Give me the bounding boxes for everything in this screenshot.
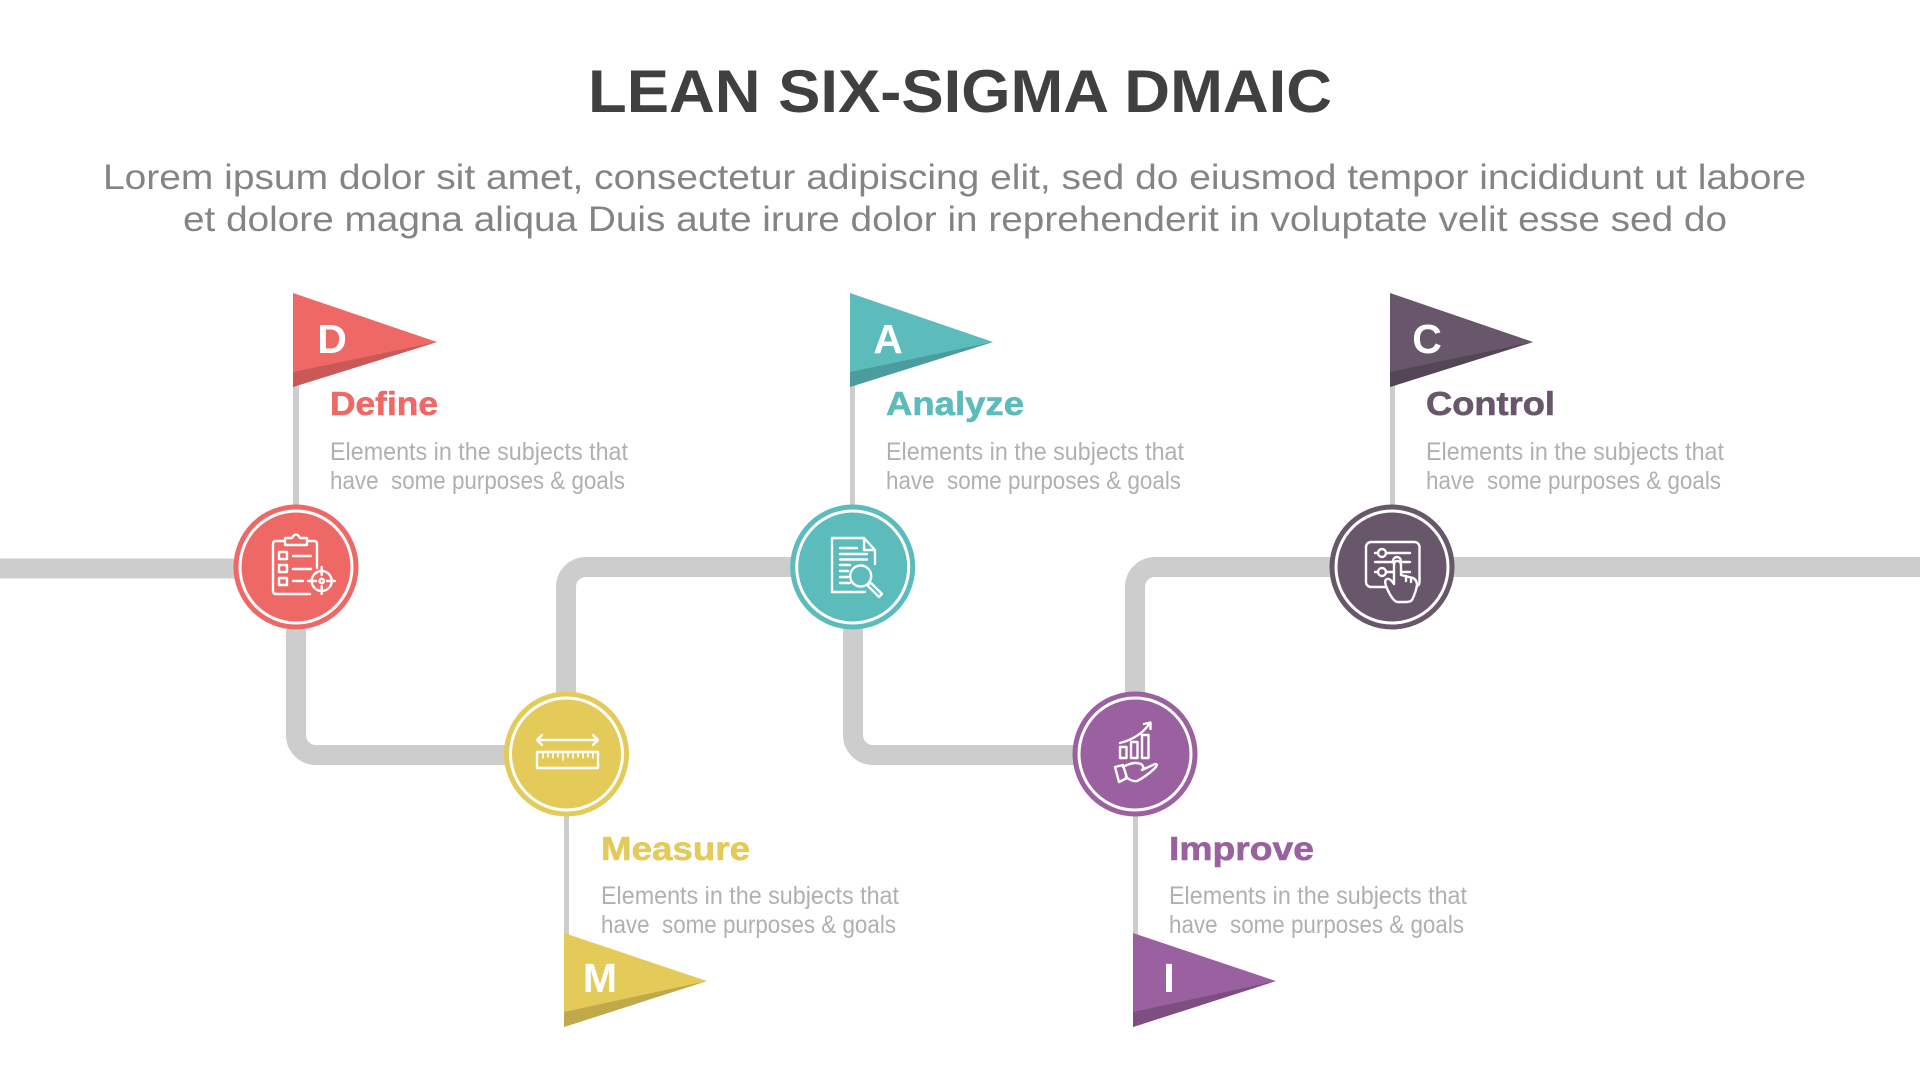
flag C: C [1412, 316, 1442, 362]
flag A [850, 293, 993, 387]
description: analyze: have some purposes & goals [886, 467, 1181, 495]
description: analyze: Elements in the subjects that [886, 438, 1184, 466]
flag pole [1390, 380, 1395, 510]
heading: control: Control [1426, 385, 1555, 422]
flag M: M [583, 955, 617, 1001]
icon: touch slider panel [1366, 542, 1420, 602]
description: control: Elements in the subjects that [1426, 438, 1724, 466]
description: improve [1169, 882, 1467, 939]
flag pole [850, 380, 855, 510]
icon: document with magnifier [832, 538, 882, 597]
circle node: analyze [790, 504, 915, 630]
panel: define [234, 293, 628, 630]
subtitle text [103, 158, 1806, 239]
flag M [564, 933, 707, 1027]
title: LEAN SIX-SIGMA DMAIC [588, 58, 1332, 125]
panel: improve [1072, 692, 1467, 1027]
heading: improve: Improve [1169, 830, 1314, 867]
description: define [330, 438, 628, 495]
flag pole [564, 805, 569, 940]
icon: growth chart on hand [1115, 722, 1157, 782]
icon: ruler with arrow [537, 735, 598, 768]
flag pole [1133, 805, 1138, 940]
heading: analyze: Analyze [886, 385, 1024, 422]
flag pole [293, 380, 299, 510]
circle node: control [1330, 504, 1454, 630]
heading: define: Define [330, 385, 438, 422]
heading: measure: Measure [601, 830, 750, 867]
description: analyze [886, 438, 1184, 495]
description: measure: Elements in the subjects that [601, 882, 899, 910]
panel: control [1330, 293, 1724, 630]
description: control: have some purposes & goals [1426, 467, 1721, 495]
description: improve: Elements in the subjects that [1169, 882, 1467, 910]
flag A: A [873, 316, 903, 362]
flag C [1390, 293, 1533, 387]
description: improve: have some purposes & goals [1169, 911, 1464, 939]
panel: measure [504, 692, 899, 1027]
description: measure: have some purposes & goals [601, 911, 896, 939]
flag I: I [1163, 955, 1175, 1001]
subtitle text: et dolore magna aliqua Duis aute irure dolor in reprehenderit in voluptate velit esse sed do [183, 200, 1727, 239]
description: measure [601, 882, 899, 939]
circle node: measure [504, 692, 629, 816]
flag D [293, 293, 437, 387]
panel: analyze [790, 293, 1184, 630]
circle node: define [234, 504, 358, 630]
flag D: D [317, 316, 347, 362]
subtitle text: Lorem ipsum dolor sit amet, consectetur adipiscing elit, sed do eiusmod tempor incididunt ut labore [103, 158, 1806, 197]
icon: clipboard with target [273, 534, 335, 594]
description: define: Elements in the subjects that [330, 438, 628, 466]
winding grey track [0, 567, 1920, 755]
description: control [1426, 438, 1724, 495]
flag I [1133, 933, 1276, 1027]
description: define: have some purposes & goals [330, 467, 625, 495]
circle node: improve [1072, 692, 1198, 816]
